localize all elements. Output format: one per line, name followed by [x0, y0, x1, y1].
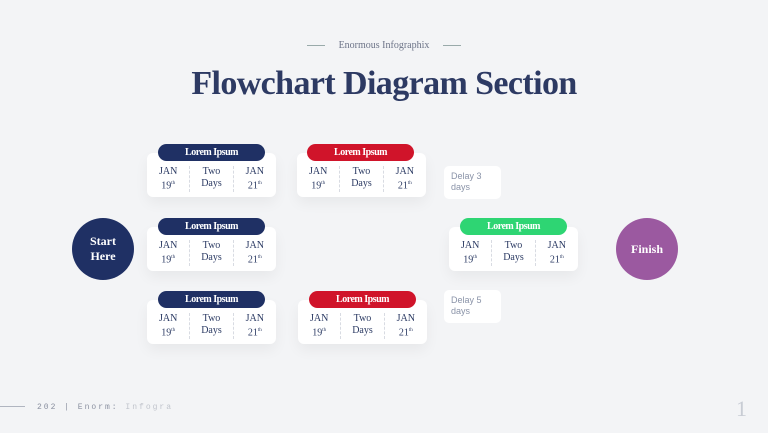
card right: 21th	[550, 254, 564, 265]
card r1c1: 19th	[161, 180, 175, 191]
card r1c1: Two	[203, 166, 220, 177]
card r1c2: Two	[353, 166, 370, 177]
start circle: Start	[90, 234, 116, 248]
pill r3c2: Lorem Ipsum	[336, 294, 389, 305]
delay 5	[444, 290, 501, 323]
card r3c2: JAN	[310, 313, 328, 324]
card r1c2: JAN	[309, 166, 327, 177]
card r2c1: 21th	[248, 254, 262, 265]
card r3c1	[147, 300, 276, 344]
pill right	[460, 218, 567, 235]
subtitle: Enormous Infographix	[339, 40, 429, 51]
finish circle	[616, 218, 678, 280]
card r1c2: 19th	[311, 180, 325, 191]
card r2c1: Two	[203, 240, 220, 251]
card r3c1: JAN	[246, 313, 264, 324]
card r2c1	[147, 227, 276, 271]
card r1c1: 21th	[248, 180, 262, 191]
title: Flowchart Diagram Section	[191, 65, 577, 102]
start circle	[72, 218, 134, 280]
card right: Days	[503, 252, 524, 263]
pill r1c2	[307, 144, 414, 161]
delay 3: Delay 3	[451, 171, 482, 181]
card r3c1: 21th	[248, 327, 262, 338]
card right: JAN	[461, 240, 479, 251]
card r3c2: JAN	[397, 313, 415, 324]
card right: 19th	[463, 254, 477, 265]
card r3c1: Days	[201, 325, 222, 336]
card r1c2: JAN	[396, 166, 414, 177]
pill right: Lorem Ipsum	[487, 221, 540, 232]
card r3c2: 19th	[312, 327, 326, 338]
pill r1c2: Lorem Ipsum	[334, 147, 387, 158]
delay 5: days	[451, 306, 470, 316]
card right	[449, 227, 578, 271]
card r3c1: Two	[203, 313, 220, 324]
delay 3	[444, 166, 501, 199]
card r1c1: JAN	[246, 166, 264, 177]
card r1c2: 21th	[398, 180, 412, 191]
pill r3c1: Lorem Ipsum	[185, 294, 238, 305]
pill r2c1	[158, 218, 265, 235]
card r1c1: Days	[201, 178, 222, 189]
card r1c1: JAN	[159, 166, 177, 177]
delay 3: days	[451, 182, 470, 192]
delay 5: Delay 5	[451, 295, 482, 305]
pill r2c1: Lorem Ipsum	[185, 221, 238, 232]
card r3c2	[298, 300, 427, 344]
page number: 1	[736, 396, 747, 421]
pill r3c1	[158, 291, 265, 308]
pill r3c2	[309, 291, 416, 308]
card r1c2: Days	[351, 178, 372, 189]
card r3c2: Two	[354, 313, 371, 324]
card right: JAN	[548, 240, 566, 251]
card r3c2: 21th	[399, 327, 413, 338]
start circle: Here	[90, 249, 116, 263]
footer: 202 | Enorm: Infogra	[37, 403, 173, 412]
pill r1c1	[158, 144, 265, 161]
finish circle: Finish	[631, 242, 663, 256]
pill r1c1: Lorem Ipsum	[185, 147, 238, 158]
card r1c1	[147, 153, 276, 197]
card r2c1: Days	[201, 252, 222, 263]
card r2c1: 19th	[161, 254, 175, 265]
card r2c1: JAN	[246, 240, 264, 251]
card r2c1: JAN	[159, 240, 177, 251]
card r1c2	[297, 153, 426, 197]
card r3c2: Days	[352, 325, 373, 336]
card r3c1: 19th	[161, 327, 175, 338]
card r3c1: JAN	[159, 313, 177, 324]
card right: Two	[505, 240, 522, 251]
